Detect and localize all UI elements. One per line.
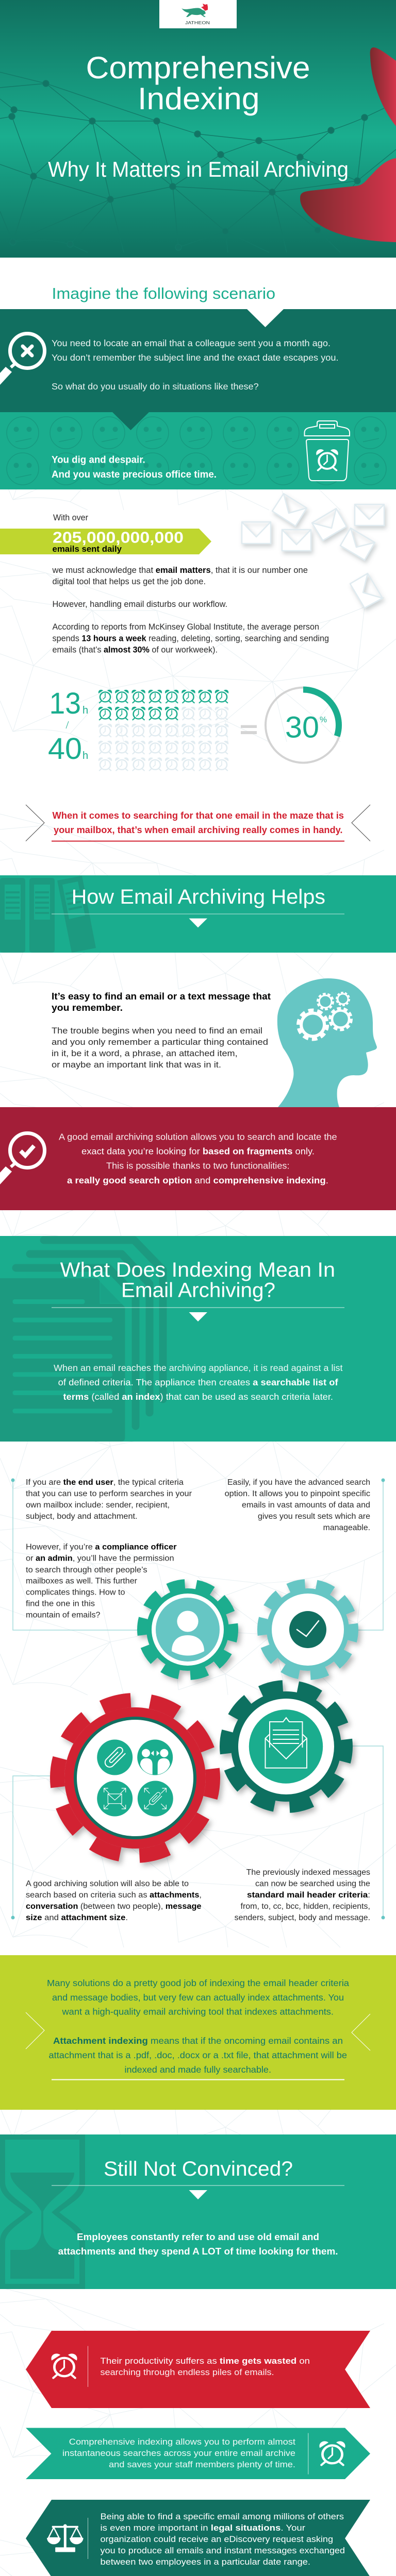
text: advanced search: manageable. — [323, 1523, 370, 1532]
text: end user: that you can use to perform searches in your — [26, 1489, 192, 1498]
callout: email archiving handy: When it comes to searching for that one email in the maze that is — [53, 810, 344, 821]
network background — [0, 72, 396, 252]
text: easy to find: or maybe an important link that was in it. — [52, 1060, 221, 1070]
text: advanced search: gives you result sets which are — [258, 1512, 370, 1521]
text: attachment criteria: size and attachment size . — [26, 1913, 128, 1922]
heading: Email Archiving? — [121, 1279, 275, 1301]
callout: email archiving handy: your mailbox, that’s when email archiving really comes in handy. — [54, 824, 342, 835]
text: attachment criteria: search based on criteria such as attachments , — [26, 1891, 202, 1900]
solution text: This is possible thanks to two functionalities: — [106, 1161, 290, 1171]
attachment text: indexed and made fully searchable. — [125, 2064, 271, 2075]
stat: 13h of 40h: 40 — [48, 732, 82, 766]
text: mail header criteria — [235, 1868, 370, 1922]
text: mail header criteria: senders, subject, body and message. — [235, 1913, 370, 1922]
text: easy to find — [52, 991, 271, 1070]
attachment text: want a high-quality email archiving tool that indexes attachments. — [61, 2007, 334, 2017]
heading — [60, 1259, 335, 1301]
title: Comprehensive — [86, 50, 310, 85]
banner: 205 billion emails: 205,000,000,000 — [53, 529, 184, 546]
logo: JATHEON — [185, 20, 210, 25]
ribbon: legal situations: between two employees in a particular date range. — [100, 2557, 310, 2567]
icon: clock — [319, 2441, 345, 2465]
gear: check — [257, 1579, 358, 1680]
title — [86, 50, 310, 116]
text: compliance officer: find the one in this — [26, 1599, 95, 1608]
attachment text: Many solutions do a pretty good job of indexing the email header criteria — [47, 1978, 349, 1988]
title: Indexing — [138, 81, 260, 116]
text: compliance officer: complicates things. How to — [26, 1588, 125, 1597]
gear: email index — [219, 1680, 353, 1814]
hourglass background — [0, 2134, 85, 2289]
heading: What Does Indexing Mean In — [60, 1259, 335, 1281]
text: email statistics: emails (that’s almost 30% of our workweek). — [53, 645, 218, 654]
text: compliance officer: mountain of emails? — [26, 1611, 101, 1619]
ribbon: legal situations: is even more important in legal situations . Your — [100, 2523, 305, 2533]
text: end user: subject, body and attachment. — [26, 1512, 137, 1521]
donut chart: 30 percent: % — [320, 716, 327, 724]
icon: trash can with clock — [304, 421, 350, 481]
banner: 205 billion emails — [0, 529, 211, 554]
logo — [159, 0, 237, 28]
equals sign — [241, 725, 257, 734]
text: compliance officer: mailboxes as well. This further — [26, 1577, 137, 1586]
scenario text: So what do you usually do in situations like these? — [52, 381, 259, 392]
text: end user: own mailbox include: sender, recipient, — [26, 1501, 170, 1510]
stat: 13h of 40h: 13 — [50, 687, 81, 720]
face pattern — [7, 417, 386, 485]
ribbon: time wasted — [26, 2331, 370, 2408]
text: mail header criteria: The previously indexed messages — [246, 1868, 370, 1877]
gear: search criteria — [48, 1691, 222, 1865]
employees text: Employees constantly refer to and use old email and — [77, 2231, 319, 2242]
text: advanced search: Easily, if you have the advanced search — [227, 1478, 370, 1487]
section: what does indexing mean — [0, 1236, 396, 1442]
text: end user: If you are the end user , the typical criteria — [26, 1478, 184, 1487]
text: end user — [26, 1478, 192, 1521]
panel: header — [0, 0, 396, 258]
ribbon: time wasted: Their productivity suffers as time gets wasted on — [100, 2356, 310, 2366]
ribbon: legal situations: you to produce all emails and instant messages exchanged — [100, 2546, 345, 2555]
definition text: When an email reaches the archiving appliance, it is read against a list — [54, 1363, 343, 1373]
text: compliance officer: to search through other people’s — [26, 1566, 147, 1574]
text: mail header criteria: from, to, cc, bcc, hidden, recipients, — [240, 1902, 370, 1911]
text: advanced search: option. It allows you to pinpoint specific — [225, 1489, 370, 1498]
text: email statistics: we must acknowledge that email matters, that it is our number one — [52, 566, 308, 575]
section: still not convinced: Still Not Convinced? — [104, 2158, 293, 2180]
text: email statistics: digital tool that helps us get the job done. — [53, 577, 206, 586]
donut chart: 30 percent — [266, 687, 341, 762]
icon: head with gears — [277, 978, 377, 1107]
text: email statistics: According to reports from McKinsey Global Institute, the average person — [53, 622, 319, 632]
solution text — [59, 1131, 337, 1185]
employees text: attachments and they spend A LOT of time looking for them. — [58, 2246, 338, 2257]
heading: imagine scenario: Imagine the following scenario — [52, 284, 275, 302]
icon: conversation — [137, 1739, 173, 1775]
panel: good solution — [0, 1107, 396, 1210]
text: easy to find: It’s easy to find an email or a text message that — [52, 991, 271, 1002]
stat: 13h of 40h: h — [82, 705, 88, 716]
text: email statistics — [52, 566, 329, 654]
icon: scales — [47, 2524, 84, 2552]
section header: how email archiving helps — [0, 875, 396, 953]
binders background — [0, 876, 96, 953]
donut chart: 30 percent: 30 — [285, 711, 319, 744]
scenario text: You need to locate an email that a colleague sent you a month ago. — [52, 338, 331, 348]
icon: attachment — [97, 1739, 133, 1775]
section header: how email archiving helps: How Email Archiving Helps — [72, 886, 325, 908]
icon: message size — [97, 1781, 133, 1817]
text: easy to find: you remember. — [52, 1003, 123, 1013]
icon: clock — [51, 2353, 77, 2378]
ribbon: legal situations — [26, 2500, 370, 2576]
icon: magnifier with check — [0, 1133, 44, 1184]
solution text: exact data you’re looking for based on fragments only. — [81, 1146, 315, 1157]
text: email statistics: However, handling email disturbs our workflow. — [53, 600, 227, 609]
text: easy to find: in it, be it a word, a phrase, an attached item, — [52, 1048, 238, 1058]
fox ear shape — [370, 47, 396, 126]
text: compliance officer — [26, 1543, 176, 1619]
ribbon: time wasted: searching through endless piles of emails. — [100, 2367, 274, 2377]
text: attachment criteria: conversation (between two people), message — [26, 1902, 202, 1911]
despair text: And you waste precious office time. — [52, 469, 217, 480]
text: compliance officer: or an admin, you’ll have the permission — [26, 1554, 174, 1563]
ribbon: instantaneous searches: instantaneous searches across your entire email archive — [62, 2448, 295, 2458]
stat: 13h of 40h: h — [82, 750, 88, 761]
icon: magnifier with cross — [0, 334, 44, 385]
document stack background — [0, 1240, 163, 1442]
callout: email archiving handy — [26, 805, 370, 842]
text: mail header criteria: can now be searched using the — [255, 1879, 370, 1888]
attachment text: attachment that is a .pdf, .doc, .docx or a .txt file, that attachment will be — [48, 2050, 347, 2060]
section: still not convinced — [0, 2134, 396, 2289]
banner: 205 billion emails: emails sent daily — [53, 544, 122, 554]
envelopes — [242, 494, 384, 608]
stat: 13h of 40h — [48, 687, 88, 766]
text: with over: With over — [53, 513, 88, 522]
solution text: a really good search option and comprehensive indexing . — [67, 1175, 328, 1185]
panel: scenario — [0, 309, 396, 412]
attachment text: and message bodies, but very few can actually index attachments. You — [52, 1992, 344, 2003]
despair text: You dig and despair. — [52, 454, 145, 466]
solution text: A good email archiving solution allows you to search and locate the — [59, 1131, 337, 1142]
employees text — [58, 2231, 338, 2257]
ribbon: instantaneous searches: and saves your staff members plenty of time. — [109, 2460, 295, 2469]
icon: open envelope — [265, 1718, 307, 1768]
text: email statistics: spends 13 hours a week reading, deleting, sorting, searching and sending — [53, 634, 329, 643]
text: easy to find: The trouble begins when you need to find an email — [52, 1026, 262, 1036]
text: compliance officer: However, if you’re a compliance officer — [26, 1543, 176, 1552]
subtitle: Why It Matters in Email Archiving — [48, 157, 349, 181]
definition text: terms (called an index) that can be used as search criteria later. — [63, 1392, 333, 1402]
gear: user — [137, 1579, 238, 1680]
fox tail shape — [300, 158, 396, 242]
ribbon: legal situations: Being able to find a specific email among millions of others — [100, 2512, 344, 2521]
definition text: of defined criteria. The appliance then creates a searchable list of — [58, 1377, 338, 1387]
scenario text: You don’t remember the subject line and the exact date escapes you. — [52, 352, 339, 363]
panel: attachment indexing — [0, 1955, 396, 2110]
text: easy to find: and you only remember a particular thing contained — [52, 1037, 268, 1047]
text: attachment criteria: A good archiving solution will also be able to — [26, 1879, 189, 1888]
clock grid: 13 of 40 hours — [98, 690, 228, 771]
connector lines — [11, 1479, 385, 1920]
despair text — [52, 454, 217, 480]
ribbon: instantaneous searches — [26, 2428, 370, 2479]
text: mail header criteria: standard mail header criteria : — [247, 1891, 370, 1900]
ribbon: legal situations: organization could receive an eDiscovery request asking — [100, 2534, 333, 2544]
panel: dig and despair — [0, 412, 396, 489]
icon: attachment size — [138, 1781, 173, 1817]
scenario text — [52, 338, 339, 392]
attachment text: Attachment indexing means that if the oncoming email contains an — [53, 2036, 343, 2046]
ribbon: instantaneous searches: Comprehensive indexing allows you to perform almost — [69, 2437, 295, 2447]
definition text — [54, 1363, 343, 1402]
text: advanced search — [225, 1478, 370, 1532]
text: attachment criteria — [26, 1879, 202, 1922]
text: advanced search: emails in vast amounts of data and — [242, 1501, 370, 1510]
attachment text — [47, 1978, 349, 2075]
